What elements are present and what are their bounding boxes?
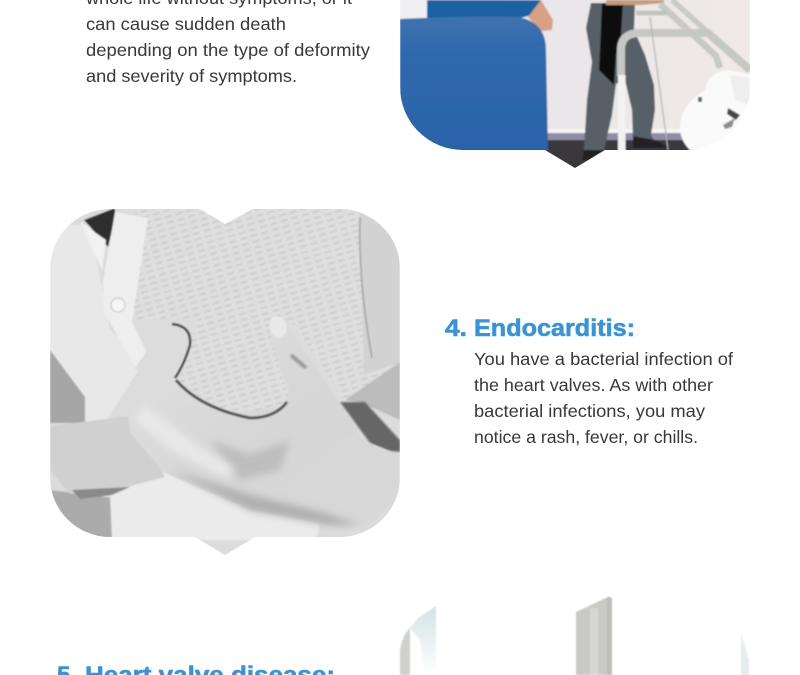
right shadow [340, 402, 400, 452]
text block: endocarditis description: notice a rash, fever, or chills. [474, 427, 698, 447]
collar dark [84, 208, 115, 247]
text block: condition 3 description: and severity of symptoms. [86, 66, 297, 86]
black panel [599, 3, 623, 85]
hand at rail [606, 0, 664, 5]
fingers left hand [136, 352, 148, 370]
text block: endocarditis description: the heart valves. As with other [474, 375, 713, 395]
forearm [528, 0, 553, 31]
trousers [584, 3, 655, 150]
white lower shirt [110, 470, 320, 540]
heading: 4. Endocarditis: 4. [445, 315, 467, 342]
heading: 4. Endocarditis: Endocarditis: [474, 315, 635, 342]
crease under hand [176, 380, 287, 418]
shirt texture [135, 209, 384, 398]
chair [400, 17, 548, 150]
main hand [129, 342, 392, 509]
text block: endocarditis description: bacterial infections, you may [474, 401, 705, 421]
left shoulder [50, 225, 138, 421]
lower shirt belly [180, 320, 287, 410]
photo: patient on treadmill [400, 0, 750, 170]
text block: condition 3 description [85, 0, 370, 86]
text block: endocarditis description [474, 349, 733, 447]
machine [680, 70, 750, 150]
rails [660, 4, 720, 68]
photo: person clutching chest [50, 205, 400, 560]
forearm [50, 416, 165, 494]
thumb nail [269, 316, 286, 338]
right sleeve [360, 212, 400, 375]
grey wall left [50, 350, 85, 423]
grey wall lower left [50, 490, 113, 540]
shoe [633, 136, 670, 148]
photo: hospital corridor (top edge) [400, 596, 749, 675]
blue shirt [427, 0, 541, 18]
text block: condition 3 description: depending on the type of deformity [86, 40, 370, 60]
placket [103, 212, 148, 368]
text block: condition 3 description: can cause sudden death [86, 14, 286, 34]
text block: endocarditis description: You have a bacterial infection of [474, 349, 733, 369]
